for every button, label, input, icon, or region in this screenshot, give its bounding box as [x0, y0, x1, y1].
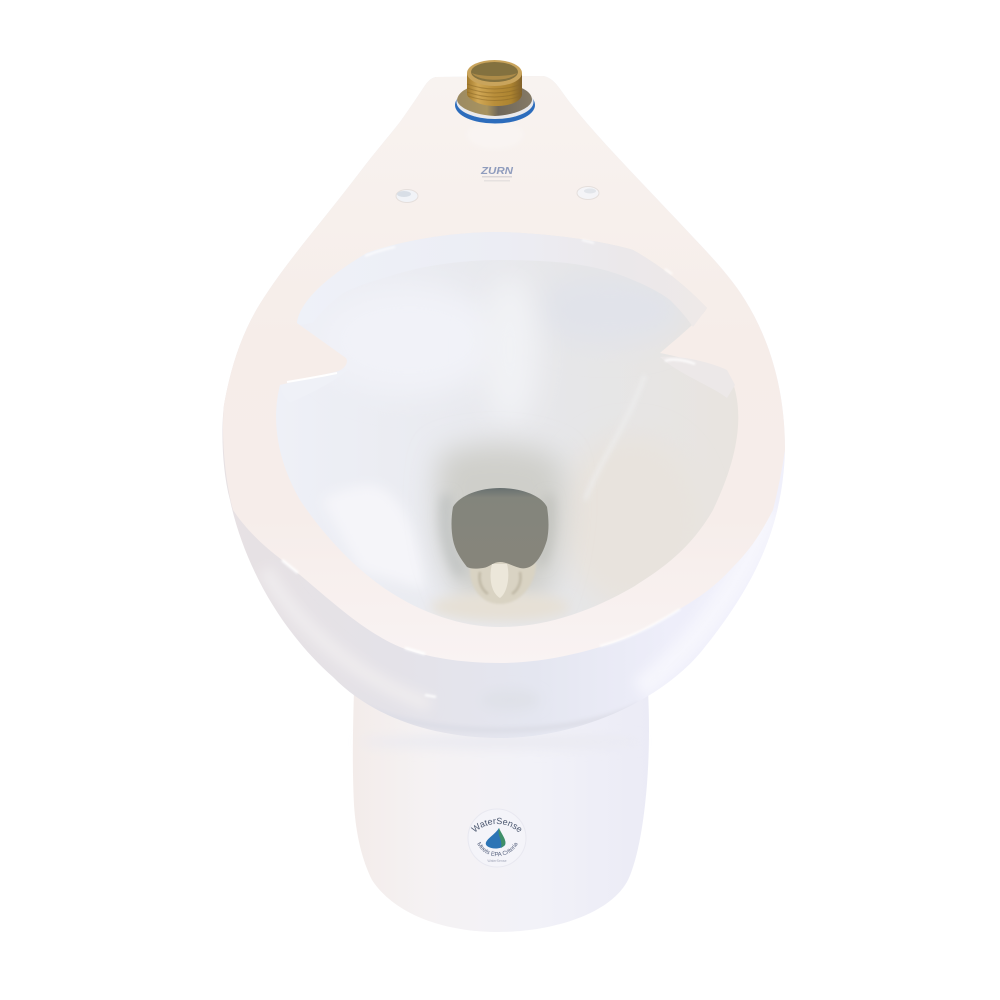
pipe opening — [467, 60, 522, 86]
ledge glints — [365, 240, 672, 274]
drain opening — [452, 488, 548, 604]
seat ledge band behind bowl — [297, 232, 707, 327]
label fine print: WaterSense — [487, 859, 507, 863]
brand logo — [480, 166, 514, 182]
product photo: white toilet bowl seen from above — [222, 60, 785, 932]
right shelf facet — [660, 357, 735, 398]
warm band under drain — [430, 593, 570, 621]
threaded brass pipe — [467, 73, 522, 106]
left wall lobe reflection — [334, 490, 419, 582]
rim edge highlights — [282, 560, 680, 697]
bowl outer body — [222, 76, 785, 738]
WaterSense label — [468, 808, 526, 868]
left shelf facet — [280, 369, 347, 403]
rim top surface — [223, 76, 785, 663]
brand logo: ZURN — [480, 166, 514, 177]
label tagline: Meets EPA Criteria — [477, 842, 518, 856]
upper bowl wall tones — [535, 275, 685, 345]
bolt hole left — [396, 190, 418, 202]
bolt hole right — [577, 186, 599, 200]
warm beige lower right wall — [574, 454, 642, 586]
label title: WaterSense — [470, 818, 522, 832]
pedestal base — [353, 690, 649, 932]
drain ridges — [491, 564, 508, 598]
water inlet spud — [455, 60, 535, 124]
left throat blue-grey stain — [445, 495, 462, 575]
bowl interior — [276, 232, 738, 627]
icon: water drop — [486, 828, 505, 849]
soft reflection under spud — [467, 121, 523, 149]
hex nut — [457, 84, 532, 116]
blue gasket — [455, 86, 535, 124]
throat shading — [436, 444, 564, 600]
right wall streak — [586, 455, 606, 496]
glossy body reflections — [265, 510, 770, 730]
